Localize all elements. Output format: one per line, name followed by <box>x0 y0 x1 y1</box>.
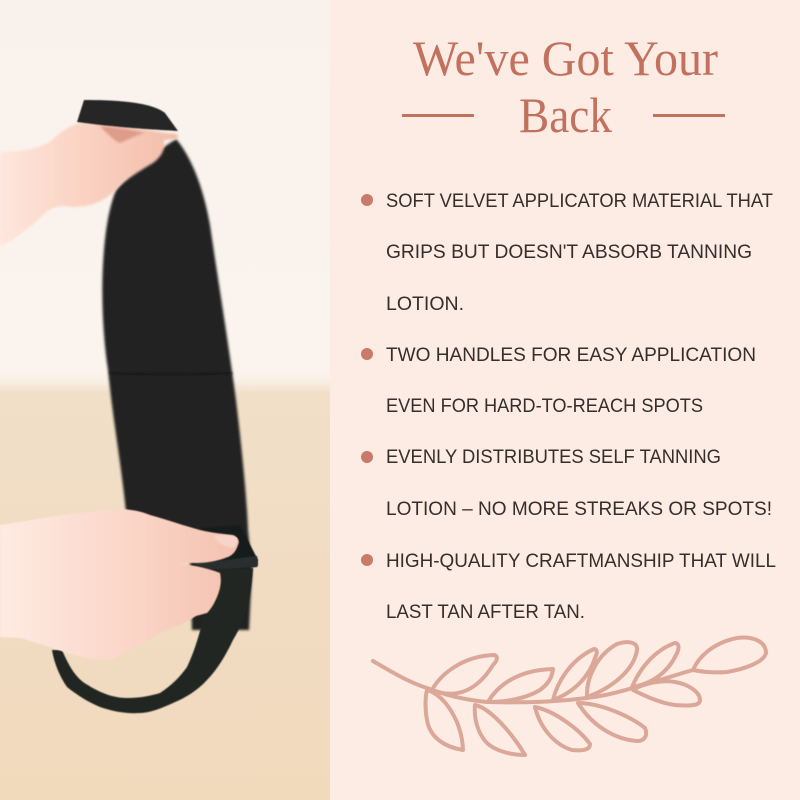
title rule left <box>402 114 474 117</box>
loop fold <box>195 556 258 569</box>
icon: leaf branch <box>373 638 766 755</box>
title: We've Got Your <box>413 30 718 86</box>
bullet 2: TWO HANDLES FOR EASY APPLICATION <box>386 344 756 366</box>
bullet 4: LAST TAN AFTER TAN. <box>386 601 585 623</box>
top hand shadow between fingers <box>100 126 145 143</box>
right panel background <box>332 0 800 800</box>
photo backdrop <box>0 0 330 800</box>
bullet 3: LOTION – NO MORE STREAKS OR SPOTS! <box>386 498 772 520</box>
velvet applicator band <box>102 139 252 630</box>
title: Back <box>519 87 612 143</box>
bullet 1: LOTION. <box>386 293 464 315</box>
feature list <box>361 190 776 623</box>
strap loop <box>200 525 258 570</box>
bullet 1 <box>361 190 773 315</box>
bullet 3 <box>361 446 772 520</box>
bullet 4: HIGH-QUALITY CRAFTMANSHIP THAT WILL <box>386 550 776 572</box>
bullet 3: EVENLY DISTRIBUTES SELF TANNING <box>386 446 721 468</box>
bullet 2 <box>361 344 756 417</box>
bullet 1: SOFT VELVET APPLICATOR MATERIAL THAT <box>386 190 773 212</box>
top hand <box>0 122 178 247</box>
title rule right <box>653 114 725 117</box>
bottom hand thumb nail <box>214 535 237 548</box>
bullet 1: GRIPS BUT DOESN'T ABSORB TANNING <box>386 241 752 263</box>
bottom hand <box>0 509 239 660</box>
bullet 4 <box>361 550 776 623</box>
title <box>413 30 718 143</box>
photo: hands holding the black applicator band <box>0 0 330 800</box>
lower handle strap <box>52 568 253 713</box>
top handle strap <box>77 100 178 131</box>
bullet 2: EVEN FOR HARD-TO-REACH SPOTS <box>386 395 703 417</box>
